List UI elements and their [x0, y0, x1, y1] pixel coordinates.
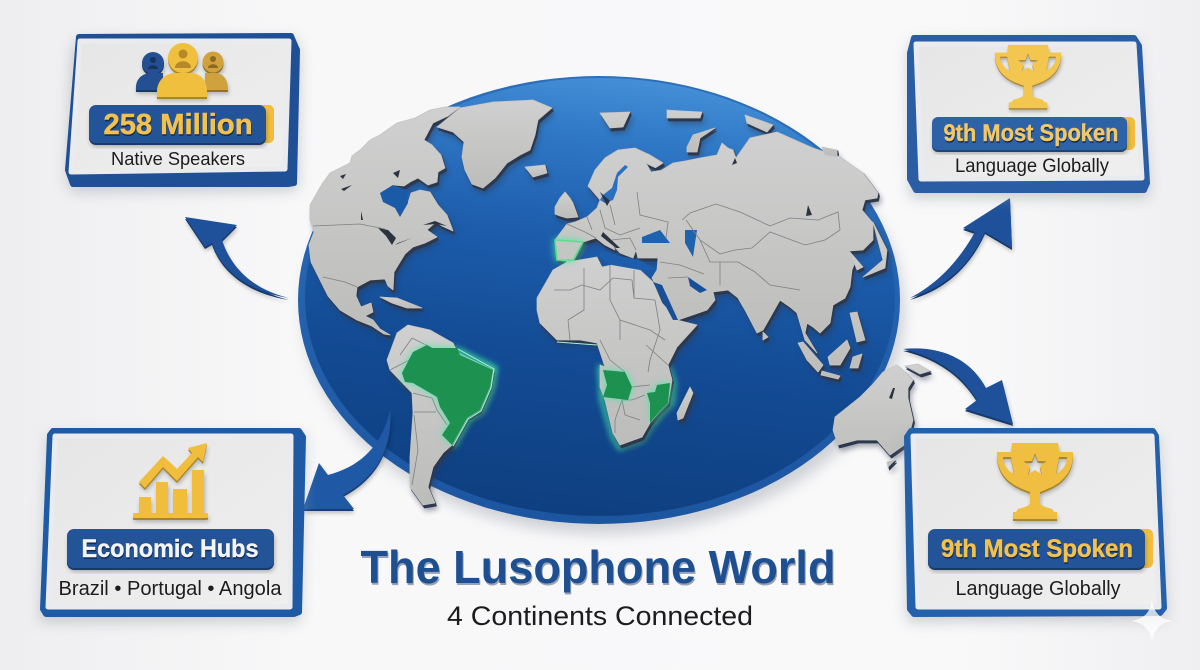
Madagascar: [677, 387, 693, 420]
stat value: 9th Most Spoken: [944, 120, 1118, 147]
icon: people: [136, 43, 228, 97]
arrow: to native speakers: [185, 217, 289, 298]
landmasses: [309, 100, 930, 505]
Brazil: [402, 345, 493, 445]
stat value: Economic Hubs: [82, 535, 258, 563]
panel: economic hubs: [40, 431, 305, 622]
panel: language rank top: [908, 38, 1150, 198]
stat pill: [950, 117, 1135, 150]
lakes and dark gaps: [340, 158, 895, 399]
stat label: Language Globally: [956, 578, 1120, 600]
Red Sea: [653, 282, 678, 320]
Iceland: [525, 165, 547, 177]
Cuba: [380, 297, 422, 308]
subtitle: 4 Continents Connected: [447, 601, 753, 631]
Mediterranean: [600, 250, 657, 270]
icon: trophy: [995, 45, 1061, 108]
arrow: to most spoken bottom: [903, 348, 1013, 424]
British Isles: [555, 192, 578, 218]
stat value: 258 Million: [104, 109, 252, 141]
Australia: [833, 364, 930, 467]
stat label: Native Speakers: [111, 149, 245, 169]
Angola: [603, 370, 632, 400]
North America: [309, 107, 460, 335]
country borders: [313, 192, 840, 485]
coastal glow: [453, 350, 674, 448]
stat value: 9th Most Spoken: [941, 535, 1133, 563]
inland seas: [380, 165, 707, 320]
arrow: to most spoken top: [910, 198, 1012, 298]
Baltic Sea: [600, 165, 640, 203]
icon: trophy: [997, 443, 1073, 519]
title: The Lusophone World: [360, 541, 836, 593]
Greenland: [437, 100, 552, 188]
world map: [309, 100, 930, 505]
bright coast lines: [453, 342, 597, 446]
icon: growth chart: [133, 443, 208, 518]
panel: native speakers: [66, 36, 300, 192]
panel: language rank bottom: [905, 431, 1167, 622]
stat label: Brazil • Portugal • Angola: [58, 578, 282, 600]
stat pill: [67, 529, 274, 568]
Portuguese-speaking countries: [402, 240, 670, 445]
Portugal and Spain: [555, 240, 583, 260]
Asian islands: [763, 222, 887, 379]
arrow: to economic hubs: [303, 410, 390, 509]
Persian Gulf: [688, 277, 707, 293]
Caspian Sea: [685, 230, 697, 257]
Eurasia: [555, 132, 878, 353]
icon: sparkle watermark: [1131, 600, 1173, 642]
Arctic islands: [600, 110, 837, 157]
stat label: Language Globally: [955, 156, 1109, 177]
Mozambique: [647, 383, 670, 423]
South America: [387, 325, 493, 505]
Black Sea: [642, 230, 670, 243]
stat pill: [100, 105, 274, 143]
Africa: [537, 257, 697, 445]
globe disc: [298, 76, 904, 534]
Hudson Bay: [380, 185, 408, 217]
stat pill: [960, 529, 1153, 568]
